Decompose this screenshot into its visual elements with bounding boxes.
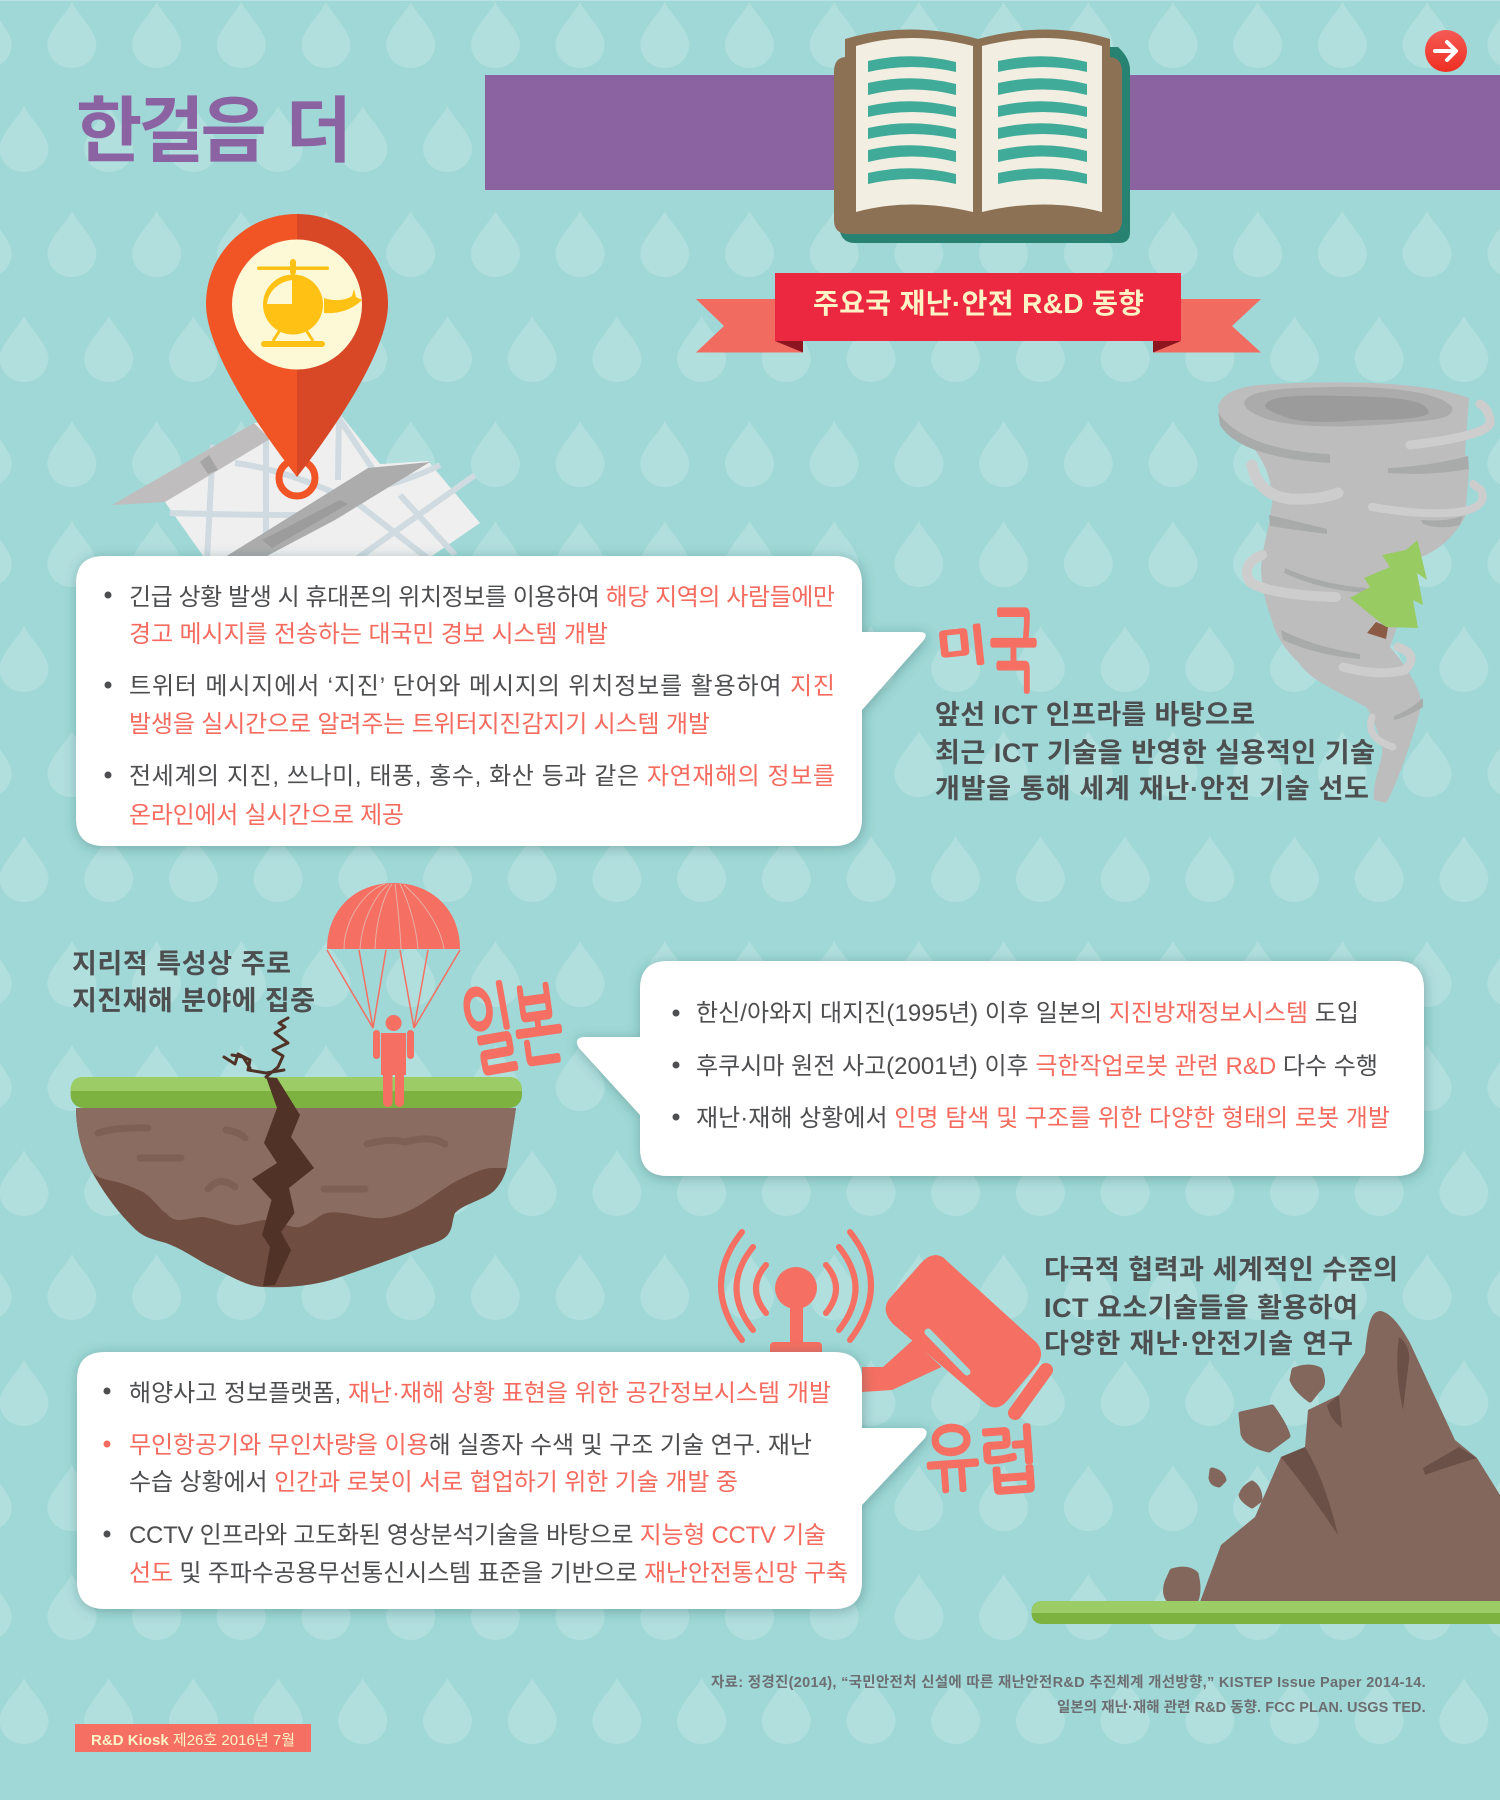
funnel mouth xyxy=(1244,387,1452,426)
heading: 미국: 국 xyxy=(990,607,1037,696)
heading: 유럽: 럽 xyxy=(976,1422,1043,1498)
icon: open book xyxy=(834,30,1130,243)
bullet list: 선도 및 주파수공용무선통신시스템 표준을 기반으로 재난안전통신망 구축 xyxy=(129,1560,848,1587)
person xyxy=(373,1015,414,1107)
helicopter xyxy=(257,259,362,347)
heading: 미국 xyxy=(934,607,1037,696)
pin ring xyxy=(279,460,315,496)
heading: 미국: 미 xyxy=(934,624,990,671)
bullet list: 긴급 상황 발생 시 휴대폰의 위치정보를 이용하여 해당 지역의 사람들에만 xyxy=(129,584,835,611)
funnel light swirls xyxy=(1247,404,1490,747)
illustration: cracked ground xyxy=(71,1018,522,1287)
text: Japan summary xyxy=(72,949,315,1016)
text: US summary: 앞선 ICT 인프라를 바탕으로 xyxy=(935,700,1255,730)
publication badge: R&D Kiosk 제26호 2016년 7월 xyxy=(91,1732,295,1749)
illustration: rockfall mountain xyxy=(1032,1311,1500,1624)
text: Europe summary xyxy=(1044,1255,1398,1359)
suspension lines xyxy=(327,950,460,1028)
surface cracks xyxy=(224,1018,288,1077)
CCTV camera xyxy=(862,1255,1046,1413)
bullet list xyxy=(104,1380,848,1587)
bullet list: 수습 상황에서 인간과 로봇이 서로 협업하기 위한 기술 개발 중 xyxy=(129,1469,738,1496)
text: Japan summary: 지진재해 분야에 집중 xyxy=(72,986,315,1016)
rock shadows xyxy=(1281,1337,1477,1535)
icon: arrow button xyxy=(1425,30,1467,72)
heading: 일본: 본 xyxy=(509,979,567,1072)
bullet list: 경고 메시지를 전송하는 대국민 경보 시스템 개발 xyxy=(129,621,608,648)
icon: map xyxy=(112,414,480,560)
illustration: antenna and CCTV xyxy=(721,1232,1046,1413)
bullet list: 한신/아와지 대지진(1995년) 이후 일본의 지진방재정보시스템 도입 xyxy=(696,1000,1359,1027)
page text lines xyxy=(868,56,1087,184)
canopy xyxy=(327,883,460,949)
bullet list: 재난·재해 상황에서 인명 탐색 및 구조를 위한 다양한 형태의 로봇 개발 xyxy=(696,1105,1390,1132)
illustration: parachutist xyxy=(327,883,460,1107)
bullet list: 전세계의 지진, 쓰나미, 태풍, 홍수, 화산 등과 같은 자연재해의 정보를 xyxy=(129,763,835,790)
speech bubble xyxy=(77,1352,927,1609)
grass strip xyxy=(1032,1601,1500,1624)
heading: 유럽 xyxy=(924,1422,1043,1498)
text: US summary: 최근 ICT 기술을 반영한 실용적인 기술 xyxy=(935,738,1375,768)
panel: United States xyxy=(76,556,926,846)
grass strip xyxy=(71,1077,522,1108)
bullet list: CCTV 인프라와 고도화된 영상분석기술을 바탕으로 지능형 CCTV 기술 xyxy=(129,1522,826,1549)
bullet list: 무인항공기와 무인차량을 이용해 실종자 수색 및 구조 기술 연구. 재난 xyxy=(129,1432,812,1459)
bullet list: 발생을 실시간으로 알려주는 트위터지진감지기 시스템 개발 xyxy=(129,711,710,738)
speech bubble xyxy=(577,961,1424,1176)
heading: 일본 xyxy=(456,979,567,1081)
falling rocks xyxy=(1166,1367,1323,1601)
text: US summary xyxy=(935,700,1375,804)
bullet list: 온라인에서 실시간으로 제공 xyxy=(129,802,404,829)
bullet list xyxy=(672,1000,1390,1132)
purple header band xyxy=(485,75,1500,190)
bullet list: 트위터 메시지에서 ‘지진’ 단어와 메시지의 위치정보를 활용하여 지진 xyxy=(129,673,835,700)
subtitle ribbon xyxy=(696,273,1261,352)
source citation: 자료: 정경진(2014), “국민안전처 신설에 따른 재난안전R&D 추진체계 개선방향,” KISTEP Issue Paper 2014-14. xyxy=(711,1674,1426,1691)
left page xyxy=(856,38,973,212)
bullet list xyxy=(104,584,835,829)
text: Japan summary: 지리적 특성상 주로 xyxy=(72,949,291,979)
icon: location pin with helicopter xyxy=(206,214,388,496)
ribbon text: 주요국 재난·안전 R&D 동향 xyxy=(813,288,1144,319)
speech bubble xyxy=(76,556,926,846)
heading: 유럽: 유 xyxy=(924,1422,981,1497)
panel: Europe xyxy=(77,1352,927,1609)
funnel dark stripes xyxy=(1218,412,1469,720)
antenna xyxy=(721,1232,871,1358)
source citation xyxy=(711,1674,1426,1716)
text: Europe summary: 다국적 협력과 세계적인 수준의 xyxy=(1044,1255,1398,1285)
tree on tornado xyxy=(1350,540,1427,639)
panel: Japan xyxy=(577,961,1424,1176)
icon: tornado xyxy=(1218,382,1490,803)
publication badge xyxy=(75,1724,311,1752)
crack xyxy=(252,1077,314,1286)
text: US summary: 개발을 통해 세계 재난·안전 기술 선도 xyxy=(935,774,1369,804)
source citation: 일본의 재난·재해 관련 R&D 동향. FCC PLAN. USGS TED. xyxy=(1057,1699,1426,1716)
title: 한걸음 더 xyxy=(76,92,352,172)
bullet list: 후쿠시마 원전 사고(2001년) 이후 극한작업로봇 관련 R&D 다수 수행 xyxy=(696,1053,1378,1080)
heading: 일본: 일 xyxy=(456,979,524,1081)
text: Europe summary: ICT 요소기술들을 활용하여 xyxy=(1044,1293,1358,1323)
right page xyxy=(982,38,1102,212)
text: Europe summary: 다양한 재난·안전기술 연구 xyxy=(1044,1329,1353,1359)
bullet list: 해양사고 정보플랫폼, 재난·재해 상황 표현을 위한 공간정보시스템 개발 xyxy=(129,1380,831,1407)
